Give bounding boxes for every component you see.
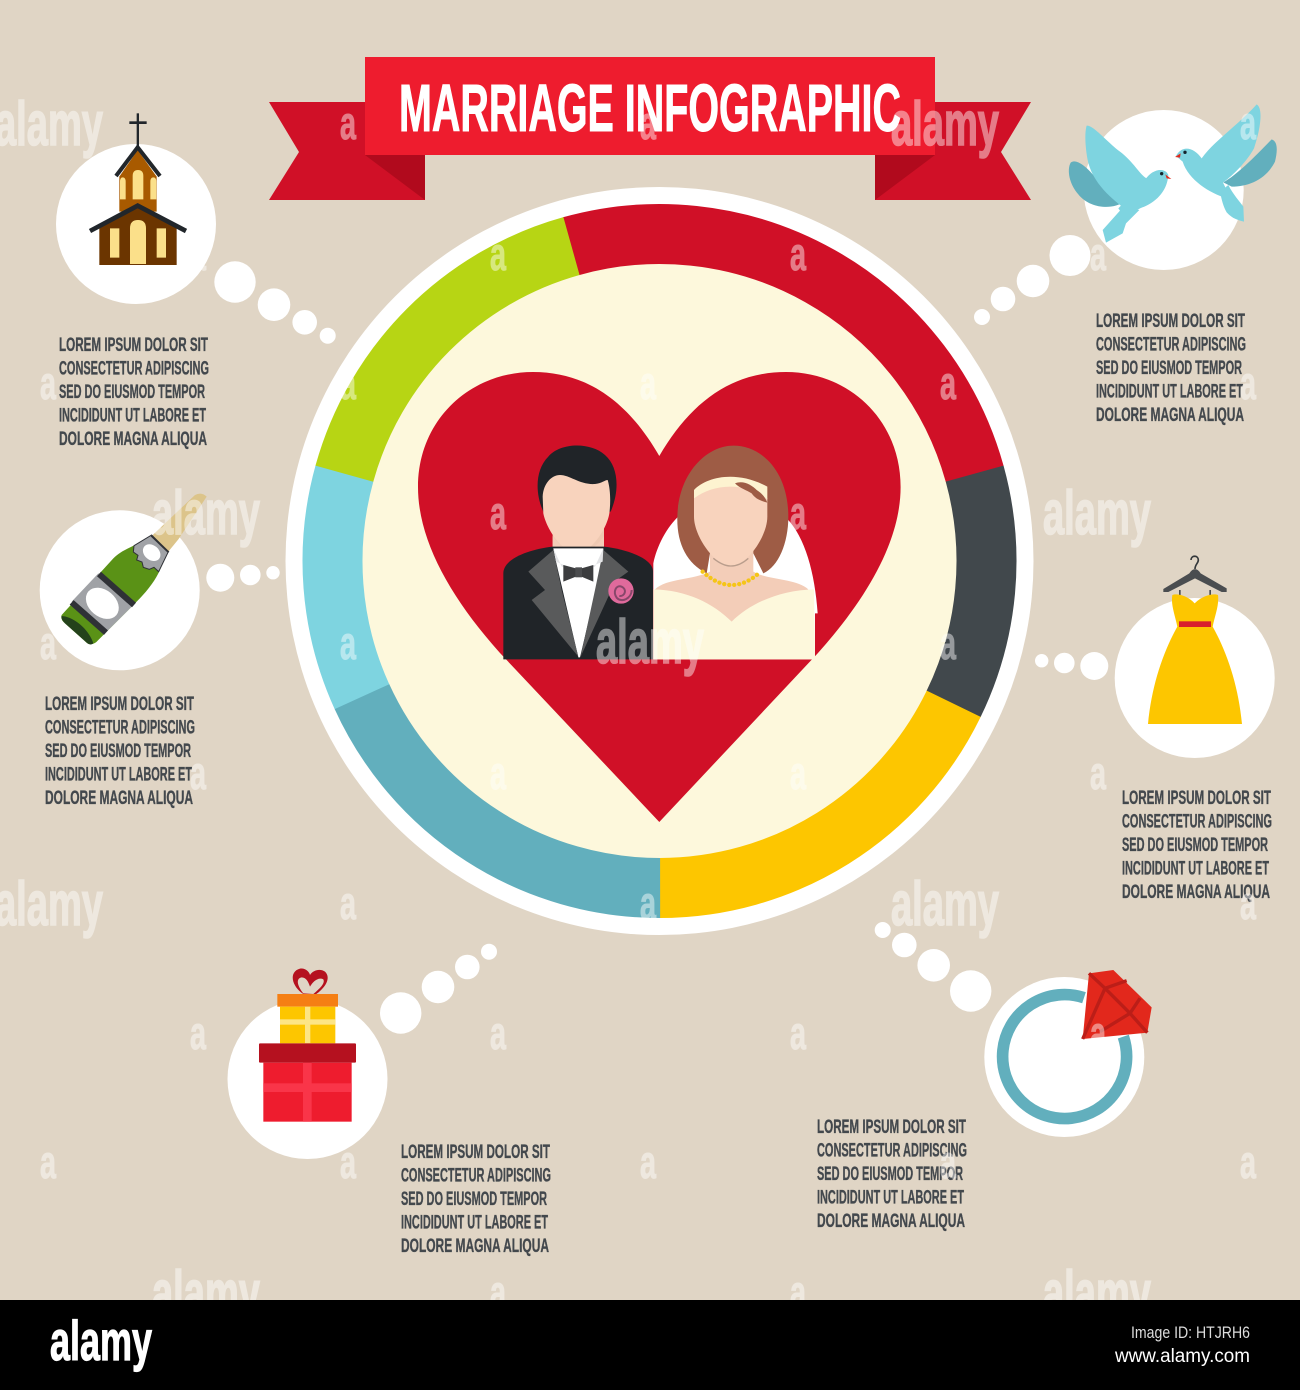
text block: CONSECTETUR ADIPISCING [45,716,195,738]
text block: CONSECTETUR ADIPISCING [59,358,209,380]
text block: LOREM IPSUM DOLOR SIT [817,1116,966,1138]
watermark overlay: alamy [0,90,103,159]
connector dots [974,235,1090,325]
gifts circle [228,999,388,1159]
panel: ring [817,922,1152,1232]
watermark overlay: alamy [1043,1259,1151,1328]
text block: INCIDIDUNT UT LABORE ET [817,1186,964,1208]
text block: SED DO EIUSMOD TEMPOR [401,1188,547,1210]
watermark overlay: a [340,1136,356,1188]
panel: dress [1035,556,1275,903]
watermark overlay: alamy [152,1259,260,1328]
icon: diamond ring [1003,970,1152,1119]
church circle [56,144,216,304]
watermark overlay: a [1090,1007,1106,1059]
title ribbon [269,57,1031,200]
text block: DOLORE MAGNA ALIQUA [45,787,193,809]
watermark overlay: a [640,97,656,149]
icon: gift boxes [259,969,356,1122]
website: www.alamy.com [1114,1346,1250,1367]
bride [653,446,818,659]
watermark overlay: a [490,1007,506,1059]
watermark overlay: a [190,228,206,280]
footer logo: alamy [50,1309,152,1372]
watermark overlay: a [1240,617,1256,669]
watermark overlay: a [1090,747,1106,799]
groom [503,446,653,659]
watermark overlay: alamy [891,90,999,159]
text block: LOREM IPSUM DOLOR SIT [401,1141,550,1163]
text block: INCIDIDUNT UT LABORE ET [59,404,206,426]
doves circle [1084,110,1244,270]
text block: DOLORE MAGNA ALIQUA [59,428,207,450]
watermark overlay: alamy [152,479,260,548]
watermark overlay: a [40,357,56,409]
title: MARRIAGE INFOGRAPHIC [399,71,901,146]
connector dots [1035,652,1108,680]
central donut chart [222,124,1097,998]
watermark overlay: a [340,877,356,929]
text block: CONSECTETUR ADIPISCING [401,1164,551,1186]
connector dots [380,944,497,1034]
watermark overlay: a [1090,228,1106,280]
text block: DOLORE MAGNA ALIQUA [817,1210,965,1232]
text block: DOLORE MAGNA ALIQUA [401,1235,549,1257]
text block: CONSECTETUR ADIPISCING [817,1140,967,1162]
watermark overlay: a [40,1136,56,1188]
watermark overlay: a [190,747,206,799]
text block [1096,310,1246,426]
watermark overlay: a [640,357,656,409]
text block [59,334,209,450]
connector dots [214,261,336,344]
watermark overlay: a [640,1136,656,1188]
watermark overlay: a [1240,1136,1256,1188]
panel: church [56,113,336,450]
icon: doves [1069,104,1277,243]
text block [1122,787,1272,903]
watermark overlay: a [340,97,356,149]
watermark overlay: a [490,747,506,799]
image id: Image ID: HTJRH6 [1131,1323,1250,1342]
watermark overlay: a [940,617,956,669]
text block [817,1116,967,1232]
watermark overlay: a [790,487,806,539]
watermark overlay: alamy [0,870,103,939]
text block [401,1141,551,1257]
watermark overlay: a [640,877,656,929]
text block: LOREM IPSUM DOLOR SIT [45,693,194,715]
connector dots [875,922,991,1012]
ring circle [984,977,1144,1137]
watermark overlay: a [1240,97,1256,149]
dress circle [1115,598,1275,758]
watermark overlay: a [1240,877,1256,929]
text block: INCIDIDUNT UT LABORE ET [45,764,192,786]
champagne circle [40,510,200,670]
watermark overlay: a [340,617,356,669]
watermark overlay: a [490,487,506,539]
couple: groom and bride [503,446,818,659]
watermark overlay: a [790,1007,806,1059]
watermark overlay: a [790,228,806,280]
text block: SED DO EIUSMOD TEMPOR [59,381,205,403]
panel: gifts [228,944,551,1257]
text block: SED DO EIUSMOD TEMPOR [45,740,191,762]
watermark overlay: alamy [1043,479,1151,548]
footer bar [0,1300,1300,1390]
watermark overlay: a [1240,357,1256,409]
icon: champagne bottle [61,494,207,645]
icon: church [90,113,186,265]
watermark overlay: a [40,617,56,669]
red heart [418,372,901,822]
icon: dress on hanger [1148,556,1242,724]
watermark overlay: a [940,357,956,409]
connector dots [206,564,280,592]
watermark overlay: alamy [891,870,999,939]
text block: INCIDIDUNT UT LABORE ET [401,1212,548,1234]
panel: doves [974,104,1277,426]
watermark overlay: a [490,228,506,280]
watermark overlay: a [190,1007,206,1059]
watermark overlay: a [340,357,356,409]
watermark overlay: a [490,1266,506,1318]
text block [45,693,195,809]
text block: LOREM IPSUM DOLOR SIT [59,334,208,356]
text block: SED DO EIUSMOD TEMPOR [817,1163,963,1185]
watermark overlay: a [940,1136,956,1188]
panel: champagne [40,494,280,809]
watermark overlay: a [790,747,806,799]
watermark overlay: alamy [596,608,704,677]
watermark overlay: a [790,1266,806,1318]
